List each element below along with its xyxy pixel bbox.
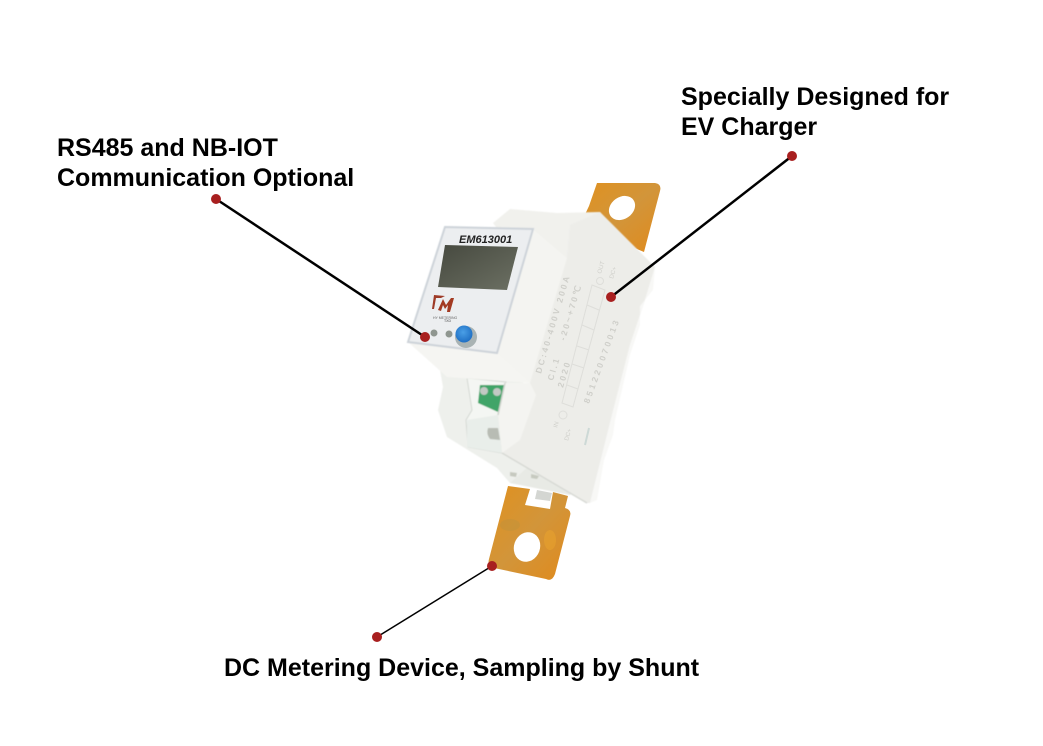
heading: RS485: RS485 and NB-IOT xyxy=(57,134,278,162)
LCD screen xyxy=(438,245,518,290)
model number: EM613001 xyxy=(459,234,512,246)
indicator slot xyxy=(585,428,589,445)
printed specification text: Cl.1 xyxy=(545,355,562,382)
heading: shunt: DC Metering Device, Sampling by Shunt xyxy=(224,654,700,682)
blue button xyxy=(455,326,477,348)
LED caption: TXD xyxy=(444,319,451,323)
logo xyxy=(432,295,458,320)
meter front bezel xyxy=(408,227,533,353)
device: DC energy meter body xyxy=(408,209,655,503)
icon: lower copper terminal xyxy=(489,486,570,580)
heading: EV charger: Specially Designed for xyxy=(681,83,949,111)
meter rear top housing xyxy=(493,209,650,300)
printed specification text: OUT xyxy=(597,260,607,275)
callout: communication xyxy=(57,134,430,342)
printed specification text: 2020 xyxy=(555,359,573,389)
meter side face xyxy=(497,212,655,503)
small LEDs xyxy=(430,330,438,336)
printed specification text: 851220070013 xyxy=(581,316,622,405)
printed specification text xyxy=(533,260,622,442)
printed specification text: DC:40-400V 200A xyxy=(533,273,572,375)
lower housing vents xyxy=(510,472,539,479)
icon: upper copper terminal xyxy=(580,183,660,252)
callout: shunt sampling xyxy=(224,561,700,682)
callout: communication: Communication Optional xyxy=(57,164,354,192)
printed specification text: DC+ xyxy=(564,428,574,442)
meter front lower band xyxy=(408,342,530,383)
logo: HY METERING xyxy=(433,316,458,320)
meter interior recess xyxy=(466,378,506,453)
circuit diagram xyxy=(562,285,605,407)
printed specification text: IN xyxy=(553,421,561,429)
callout: EV charger xyxy=(606,83,949,302)
callout: EV charger: EV Charger xyxy=(681,113,817,141)
meter lower housing xyxy=(438,370,570,495)
printed specification text: -20~+70℃ xyxy=(557,282,584,342)
green terminal block xyxy=(478,385,505,412)
printed specification text: DC+ xyxy=(609,266,619,280)
